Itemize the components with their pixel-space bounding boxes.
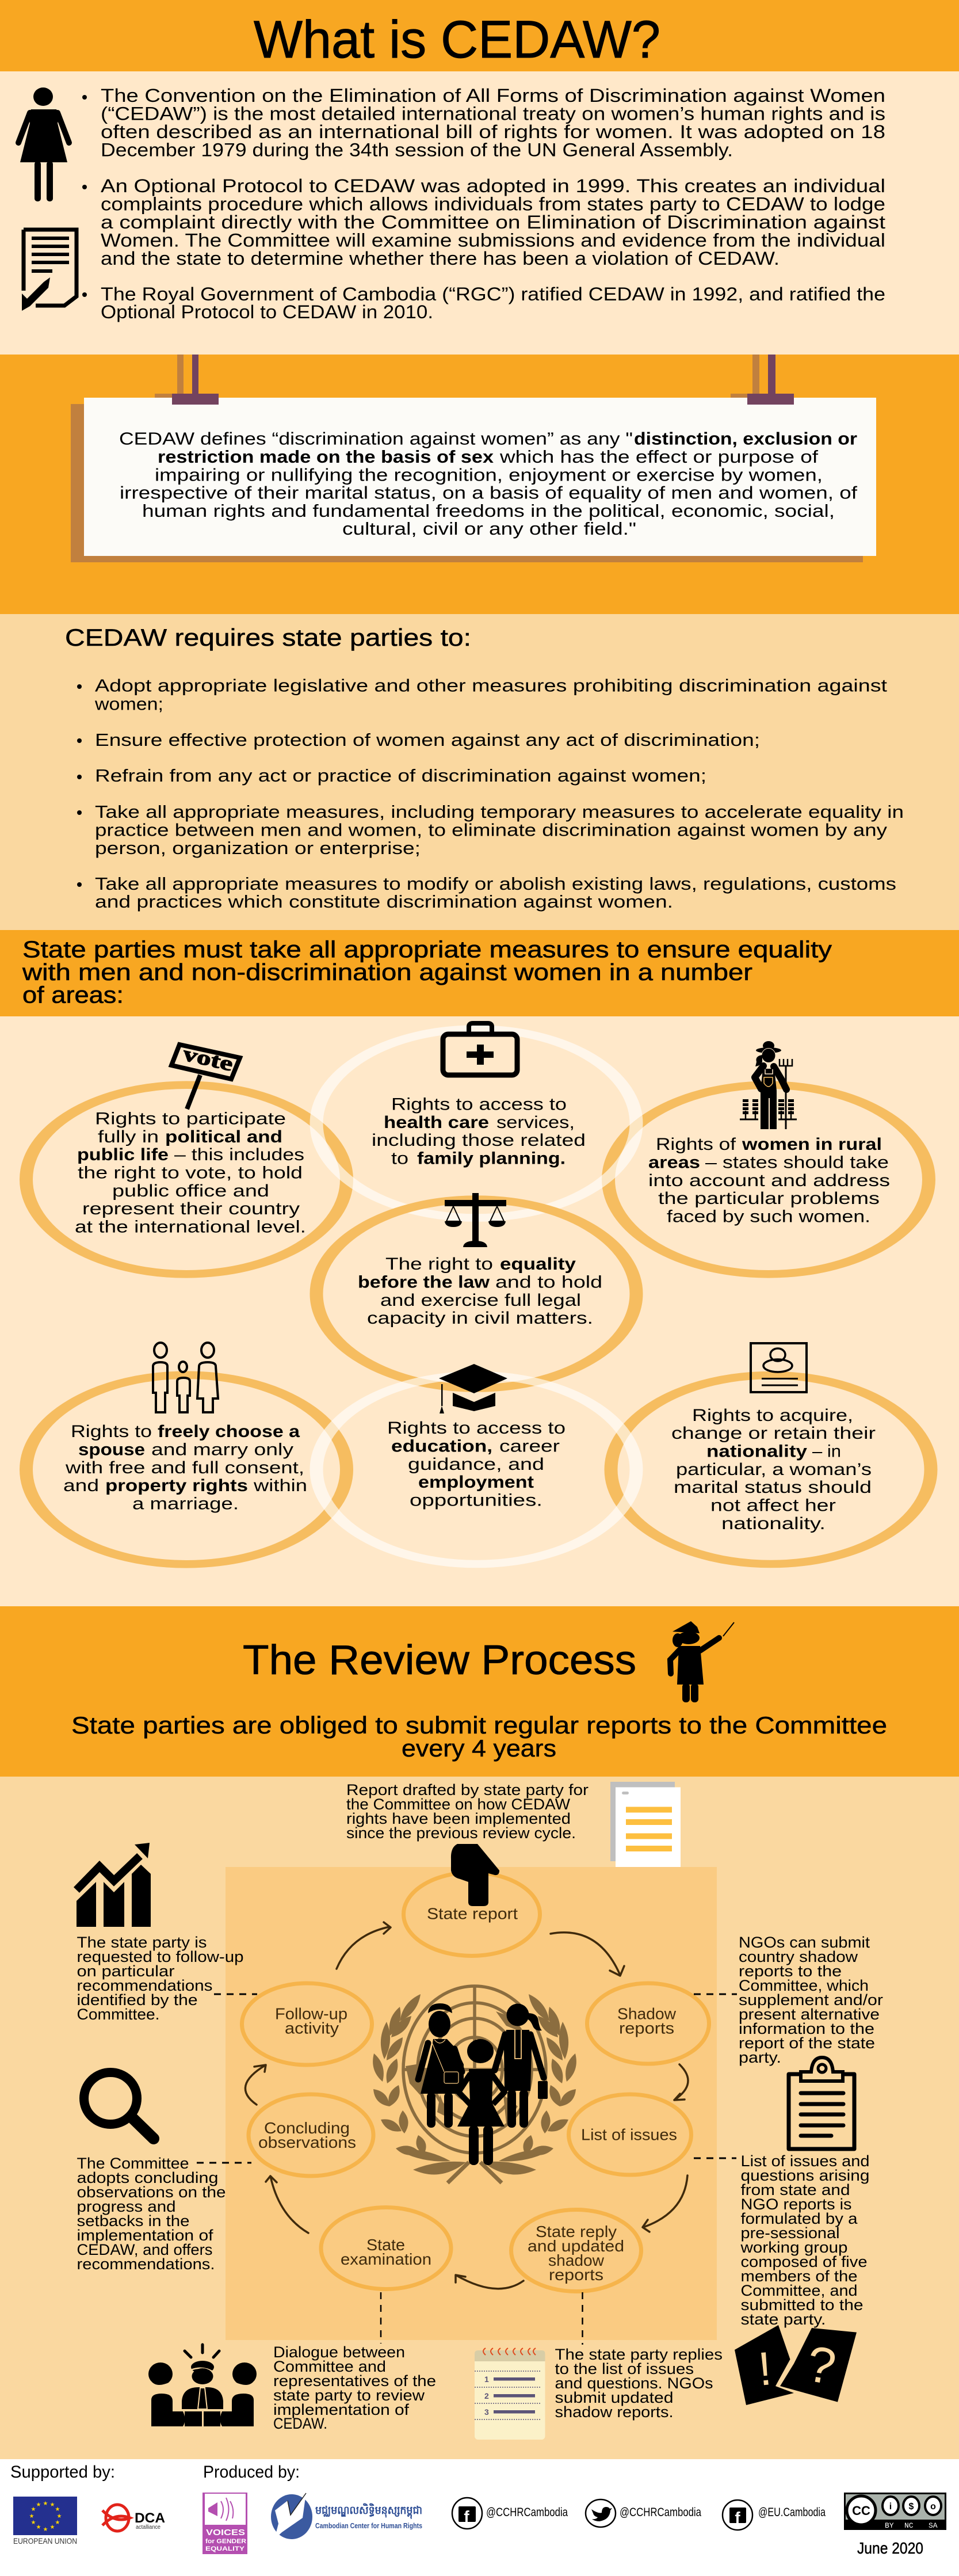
social: CCHR Facebook	[452, 2498, 568, 2529]
panel: areas heading band	[0, 930, 959, 1016]
icon: meeting of three people	[148, 2345, 257, 2426]
logo: Voices for Gender Equality	[203, 2493, 247, 2554]
text: state reply description: The state party replies	[555, 2346, 723, 2363]
icon: family	[153, 1343, 218, 1412]
badge: Creative Commons licence: i	[889, 2502, 892, 2512]
text: equality before the law: capacity in civil matters.	[367, 1309, 593, 1328]
text: women in rural areas: the particular problems	[658, 1189, 880, 1208]
text: spouse and property: freely choose a	[158, 1422, 300, 1441]
definition text: which has the effect or purpose of	[499, 447, 818, 467]
icon: numbered notepad: 1	[484, 2375, 489, 2384]
text: shadow reports description: report of the state	[739, 2034, 875, 2052]
text: state examination description: Committee and	[273, 2358, 386, 2375]
panel: footer	[10, 2463, 946, 2557]
social: EU Cambodia Facebook: f	[735, 2509, 740, 2527]
bullet text block: An Optional Protocol to CEDAW was adopted in 1999. This creates an individual	[101, 176, 885, 196]
cycle background	[226, 1867, 717, 2340]
rings	[26, 1029, 931, 1564]
text: concluding observations description: recommendations.	[77, 2255, 215, 2273]
definition text: CEDAW defines “discrimination against women” as any "	[119, 428, 633, 449]
text: concluding observations description: CEDAW, and offers	[77, 2241, 213, 2258]
text: political and public life: the right to vote, to hold	[78, 1164, 303, 1182]
logo: Cambodian Center for Human Rights: មជ្ឈមណ្ឌលសិទ្ធិមនុស្សកម្ពុជា	[315, 2503, 422, 2519]
text: list of issues description: Committee, and	[741, 2282, 857, 2299]
logo: European Union: ★	[43, 2501, 48, 2507]
panel: CEDAW requires state parties	[0, 614, 959, 930]
cycle stage labels: reports	[619, 2019, 674, 2037]
text: education and employment	[387, 1419, 566, 1510]
text: equality before the law: The right to	[385, 1255, 493, 1274]
bullet text block: Optional Protocol to CEDAW in 2010.	[101, 302, 433, 322]
cycle stage labels: State reply	[536, 2223, 617, 2240]
text: political and public life: at the international level.	[75, 1218, 306, 1236]
obligations list	[77, 676, 904, 912]
figure: right woman	[495, 2004, 548, 2128]
panel: review process header	[0, 1606, 959, 1777]
areas heading: with men and non-discrimination against women in a number	[22, 959, 752, 985]
text: state report description: Report drafted by state party for	[346, 1781, 589, 1798]
text: political and public life: public office and	[112, 1182, 269, 1201]
text: women in rural areas: areas	[648, 1153, 700, 1172]
cycle stage labels: State report	[427, 1905, 518, 1922]
subheading: reporting cycle: every 4 years	[402, 1735, 556, 1762]
text: women in rural areas: women in rural	[742, 1135, 882, 1154]
definition text: cultural, civil or any other field."	[342, 519, 636, 539]
text: spouse and property	[63, 1422, 307, 1514]
text: list of issues description: submitted to the	[741, 2296, 863, 2314]
hanging sign posts	[71, 355, 863, 562]
dashed connectors	[197, 1994, 737, 2345]
text: nationality: nationality	[706, 1442, 807, 1461]
cycle arrows	[245, 1922, 688, 2289]
text: shadow reports description: party.	[739, 2049, 781, 2066]
text: women in rural areas: into account and address	[648, 1171, 890, 1190]
text: state reply description: and questions. NGOs	[555, 2375, 713, 2392]
text: concluding observations description: adopts concluding	[77, 2169, 219, 2186]
text: equality before the law: equality	[500, 1255, 576, 1274]
text: spouse and property: Rights to	[71, 1422, 152, 1441]
text: shadow reports description: information to the	[739, 2020, 874, 2037]
icon: vote sign	[171, 1042, 240, 1109]
icon: growth chart	[77, 1843, 151, 1927]
text: state examination description: CEDAW.	[273, 2415, 327, 2432]
text: shadow reports description: reports to the	[739, 1963, 842, 1980]
text: shadow reports description: NGOs can submit	[739, 1934, 870, 1951]
cycle stage labels: List of issues	[581, 2126, 677, 2143]
text: health care: family planning.	[417, 1149, 566, 1168]
text: shadow reports description: present alternative	[739, 2006, 880, 2023]
text: education and employment: Rights to access to	[387, 1419, 566, 1438]
text: list of issues description: formulated by a	[741, 2210, 858, 2227]
panel: review process diagram	[0, 1777, 959, 2459]
cycle stage labels: Shadow	[617, 2005, 677, 2022]
UN emblem	[373, 1985, 576, 2183]
text: equality before the law: before the law	[358, 1273, 490, 1291]
text: education and employment: career	[499, 1436, 560, 1456]
text: shadow reports description: country shadow	[739, 1948, 858, 1965]
logo: Voices for Gender Equality: for GENDER	[205, 2538, 246, 2545]
figure: child	[457, 2039, 505, 2165]
text: political and public life: Rights to participate	[95, 1110, 286, 1128]
text: follow-up description: Committee.	[77, 2006, 160, 2023]
text: equality before the law: and to hold	[495, 1273, 602, 1291]
text: concluding observations description: setbacks in the	[77, 2212, 190, 2230]
bullet text block: (“CEDAW”) is the most detailed international treaty on women’s human rights and is	[101, 104, 885, 124]
text: list of issues description: List of issues and	[741, 2152, 870, 2170]
text: nationality: particular, a woman’s	[676, 1460, 872, 1479]
cycle stage labels: Concluding	[264, 2119, 350, 2137]
text: follow-up description: The state party is	[77, 1934, 207, 1951]
badge: Creative Commons licence: CC	[852, 2503, 870, 2518]
badge: Creative Commons licence: BY	[885, 2521, 894, 2530]
definition card	[84, 355, 876, 556]
text: political and public life: political and	[165, 1127, 282, 1146]
text: list of issues description: state party.	[741, 2311, 826, 2328]
text: equality before the law	[358, 1255, 602, 1328]
text: follow-up description: recommendations	[77, 1977, 213, 1994]
text: list of issues description	[740, 2152, 870, 2328]
text: state report description	[346, 1781, 589, 1842]
text: women in rural areas: – states should take	[705, 1153, 889, 1172]
icon: numbered notepad: 2	[484, 2391, 489, 2400]
text: spouse and property: and	[63, 1476, 99, 1495]
heading: CEDAW requires state parties to:	[65, 624, 471, 651]
logo: European Union: ★	[50, 2524, 55, 2531]
text: state report description: since the previous review cycle.	[346, 1824, 576, 1842]
icon: pointing hand	[451, 1844, 499, 1906]
cycle stage labels: reports	[549, 2266, 603, 2284]
icon: nationality ID card	[751, 1343, 807, 1392]
areas heading: State parties must take all appropriate measures to ensure equality	[22, 936, 832, 962]
bullet text block: complaints procedure which allows individuals from states party to CEDAW to lodge	[101, 193, 885, 214]
logo: Cambodian Center for Human Rights	[271, 2493, 422, 2539]
text: spouse and property: property rights	[105, 1476, 248, 1495]
logo: Voices for Gender Equality: EQUALITY	[205, 2545, 245, 2552]
bullet text block: Women. The Committee will examine submissions and evidence from the individual	[101, 230, 885, 251]
text: spouse and property: spouse	[78, 1440, 145, 1460]
cycle stage labels: observations	[258, 2133, 356, 2151]
obligations list: women;	[94, 694, 163, 714]
text: concluding observations description: observations on the	[77, 2183, 226, 2201]
icon: farmer woman	[740, 1041, 797, 1129]
text: spouse and property: within	[253, 1476, 307, 1495]
definition text: distinction, exclusion or	[634, 428, 857, 449]
cycle stage labels	[258, 1905, 677, 2284]
icon: numbered notepad	[475, 2348, 545, 2440]
figure: left woman	[418, 2003, 464, 2128]
logo: European Union: ★	[36, 2524, 41, 2531]
text: state examination description	[273, 2343, 436, 2432]
bullet text block: The Royal Government of Cambodia (“RGC”) ratified CEDAW in 1992, and ratified the	[101, 284, 885, 304]
definition text	[119, 428, 857, 539]
cycle stage labels: activity	[285, 2019, 339, 2037]
panel: rights areas	[0, 1016, 959, 1606]
icon: exclamation and question cards	[735, 2325, 857, 2405]
text: shadow reports description: Committee, which	[739, 1977, 869, 1994]
text: health care: to	[391, 1149, 408, 1168]
text: follow-up description: requested to follow-up	[77, 1948, 244, 1965]
text: education and employment: education,	[391, 1436, 492, 1456]
figures: three women	[418, 2003, 548, 2165]
logo: European Union: ★	[57, 2513, 62, 2520]
text: health care: including those related	[372, 1131, 586, 1150]
social: CCHR Twitter: @CCHRCambodia	[620, 2506, 701, 2519]
cycle stage labels: State	[366, 2236, 405, 2254]
text: state report description: the Committee on how CEDAW	[346, 1796, 571, 1813]
subheading: reporting cycle: State parties are obliged to submit regular reports to the Committee	[71, 1712, 887, 1739]
text: education and employment: guidance, and	[408, 1455, 544, 1474]
icon: document and pencil	[22, 230, 77, 311]
obligations list: Refrain from any act or practice of discrimination against women;	[95, 765, 706, 786]
bullet text block: a complaint directly with the Committee on Elimination of Discrimination against	[101, 212, 885, 233]
logo: Voices for Gender Equality: VOICES	[206, 2528, 245, 2537]
heading: the review process: The Review Process	[243, 1637, 636, 1683]
logo: European Union: ★	[29, 2513, 35, 2520]
obligations list: Take all appropriate measures, including temporary measures to accelerate equality in	[95, 802, 904, 822]
cycle stage rings	[242, 1873, 709, 2292]
text: health care: health care	[384, 1113, 489, 1132]
logo: European Union	[13, 2497, 77, 2545]
logo: European Union: ★	[55, 2506, 60, 2513]
bullet text block: December 1979 during the 34th session of the UN General Assembly.	[101, 139, 733, 160]
icon: scales of justice	[445, 1193, 506, 1247]
text: follow-up description: identified by the	[77, 1991, 198, 2009]
text: state examination description: representatives of the	[273, 2372, 436, 2390]
text: list of issues description: NGO reports is	[741, 2196, 851, 2213]
text: spouse and property: with free and full consent,	[65, 1458, 304, 1477]
text: supported by: Supported by:	[10, 2463, 115, 2482]
icon: medical bag	[443, 1023, 517, 1075]
icon: woman	[18, 87, 69, 201]
badge: Creative Commons licence: o	[930, 2502, 936, 2512]
social: EU Cambodia Facebook	[723, 2500, 826, 2530]
text: nationality	[671, 1406, 876, 1533]
text: list of issues description: working group	[740, 2239, 848, 2256]
text: political and public life: – this includes	[174, 1145, 304, 1164]
badge: Creative Commons licence: SA	[929, 2521, 938, 2530]
text: state examination description: Dialogue between	[273, 2343, 405, 2361]
text: political and public life: represent their country	[82, 1199, 300, 1218]
text: produced by: Produced by:	[203, 2463, 300, 2482]
text: women in rural areas: faced by such women.	[667, 1207, 870, 1226]
definition text: human rights and fundamental freedoms in the political, economic, social,	[142, 501, 835, 521]
text: health care: services,	[496, 1113, 575, 1132]
cycle stage labels: Follow-up	[275, 2005, 347, 2022]
text: nationality: – in	[812, 1442, 841, 1461]
icon: clipboard	[789, 2057, 854, 2149]
logo: European Union: EUROPEAN UNION	[13, 2536, 77, 2545]
text: state report description: rights have been implemented	[346, 1810, 571, 1827]
logo: European Union: ★	[36, 2502, 41, 2508]
obligations list: practice between men and women, to eliminate discrimination against women by any	[95, 820, 888, 840]
bullet text block	[82, 85, 885, 322]
areas heading: of areas:	[22, 982, 124, 1008]
text: nationality: not affect her	[710, 1496, 836, 1515]
bullet text block: The Convention on the Elimination of All Forms of Discrimination against Women	[101, 85, 885, 106]
bullet text block: often described as an international bill of rights for women. It was adopted on 18	[101, 121, 885, 142]
logo: European Union: ★	[31, 2520, 36, 2526]
text: list of issues description: pre-sessional	[741, 2224, 840, 2242]
icon: numbered notepad: 3	[484, 2407, 489, 2417]
text: nationality: change or retain their	[671, 1424, 876, 1443]
logo: European Union: ★	[50, 2502, 55, 2508]
text: state examination description: state party to review	[273, 2387, 425, 2404]
text: shadow reports description	[739, 1934, 883, 2066]
text: concluding observations description: The Committee	[77, 2155, 189, 2172]
text: spouse and property: a marriage.	[132, 1494, 239, 1514]
text: state reply description	[555, 2346, 723, 2421]
text: equality before the law: and exercise full legal	[380, 1291, 581, 1310]
logo: European Union: ★	[31, 2506, 36, 2513]
text: list of issues description: composed of five	[741, 2253, 868, 2270]
text: concluding observations description	[77, 2155, 226, 2273]
icon: vote sign: vote	[181, 1042, 235, 1076]
logo: DCA actalliance: DCA	[135, 2510, 165, 2526]
text: women in rural areas: Rights of	[656, 1135, 736, 1154]
text: political and public life	[75, 1110, 306, 1236]
logo: European Union: ★	[55, 2520, 60, 2526]
title: What is CEDAW?	[254, 10, 660, 69]
logo: DCA actalliance	[102, 2505, 165, 2531]
icon: report document	[610, 1782, 681, 1867]
text: spouse and property: and marry only	[151, 1440, 293, 1460]
icon: graduation cap	[439, 1364, 507, 1413]
badge: Creative Commons licence: $	[909, 2502, 914, 2512]
icon: teacher with pointer	[670, 1621, 734, 1702]
badge: Creative Commons licence: NC	[904, 2521, 914, 2530]
text: concluding observations description: progress and	[77, 2198, 176, 2215]
social: CCHR Twitter	[586, 2499, 701, 2527]
text: follow-up description	[77, 1934, 244, 2023]
obligations list: Take all appropriate measures to modify or abolish existing laws, regulations, customs	[95, 874, 896, 894]
definition text: restriction made on the basis of sex	[158, 447, 494, 467]
obligations list: and practices which constitute discrimination against women.	[95, 891, 673, 912]
cycle stage labels: and updated	[528, 2237, 624, 2255]
text: shadow reports description: supplement and/or	[739, 1991, 883, 2009]
text: education and employment: opportunities.	[410, 1491, 542, 1510]
text: political and public life: fully in	[98, 1127, 159, 1146]
icon: exclamation and question cards: ?	[803, 2334, 840, 2395]
logo: Cambodian Center for Human Rights: Cambodian Center for Human Rights	[315, 2521, 422, 2530]
bullet text block: and the state to determine whether there has been a violation of CEDAW.	[101, 248, 780, 269]
text: state examination description: implementation of	[273, 2401, 410, 2418]
subheading: reporting cycle	[71, 1712, 887, 1762]
title band	[0, 0, 959, 71]
text: concluding observations description: implementation of	[77, 2227, 213, 2244]
text: state reply description: shadow reports.	[555, 2403, 673, 2421]
text: date: June 2020	[857, 2539, 923, 2557]
text: list of issues description: members of the	[741, 2268, 857, 2285]
cycle stage labels: examination	[341, 2250, 431, 2268]
text: nationality: Rights to acquire,	[692, 1406, 853, 1425]
obligations list: Adopt appropriate legislative and other measures prohibiting discrimination against	[95, 676, 887, 695]
text: nationality: nationality.	[721, 1514, 826, 1533]
badge: Creative Commons licence	[844, 2493, 946, 2530]
text: health care	[372, 1095, 586, 1168]
icon: magnifying glass	[84, 2072, 154, 2139]
definition text: impairing or nullifying the recognition, enjoyment or exercise by women,	[155, 465, 823, 485]
text: nationality: marital status should	[674, 1478, 872, 1497]
text: political and public life: public life	[77, 1145, 169, 1164]
obligations list: Ensure effective protection of women against any act of discrimination;	[95, 730, 760, 750]
text: state reply description: submit updated	[555, 2389, 673, 2406]
text: women in rural areas	[648, 1135, 890, 1226]
text: state reply description: to the list of issues	[555, 2360, 694, 2377]
cycle stage labels: shadow	[548, 2251, 605, 2269]
panel: what is CEDAW introduction	[0, 71, 959, 355]
areas heading	[22, 936, 832, 1008]
social: CCHR Facebook: f	[464, 2508, 469, 2525]
text: list of issues description: from state and	[741, 2181, 850, 2198]
icon: exclamation and question cards: !	[756, 2342, 774, 2396]
definition text: irrespective of their marital status, on a basis of equality of men and women, of	[120, 482, 857, 503]
social: CCHR Facebook: @CCHRCambodia	[486, 2506, 568, 2519]
text: health care: Rights to access to	[391, 1095, 567, 1114]
text: follow-up description: on particular	[77, 1963, 175, 1980]
logo: European Union: ★	[43, 2527, 48, 2533]
social: EU Cambodia Facebook: @EU.Cambodia	[758, 2506, 826, 2519]
obligations list: person, organization or enterprise;	[95, 838, 421, 858]
text: list of issues description: questions arising	[741, 2167, 870, 2184]
text: education and employment: employment	[418, 1473, 534, 1492]
logo: DCA actalliance: actalliance	[136, 2524, 161, 2531]
panel: definition of discrimination	[0, 355, 959, 615]
